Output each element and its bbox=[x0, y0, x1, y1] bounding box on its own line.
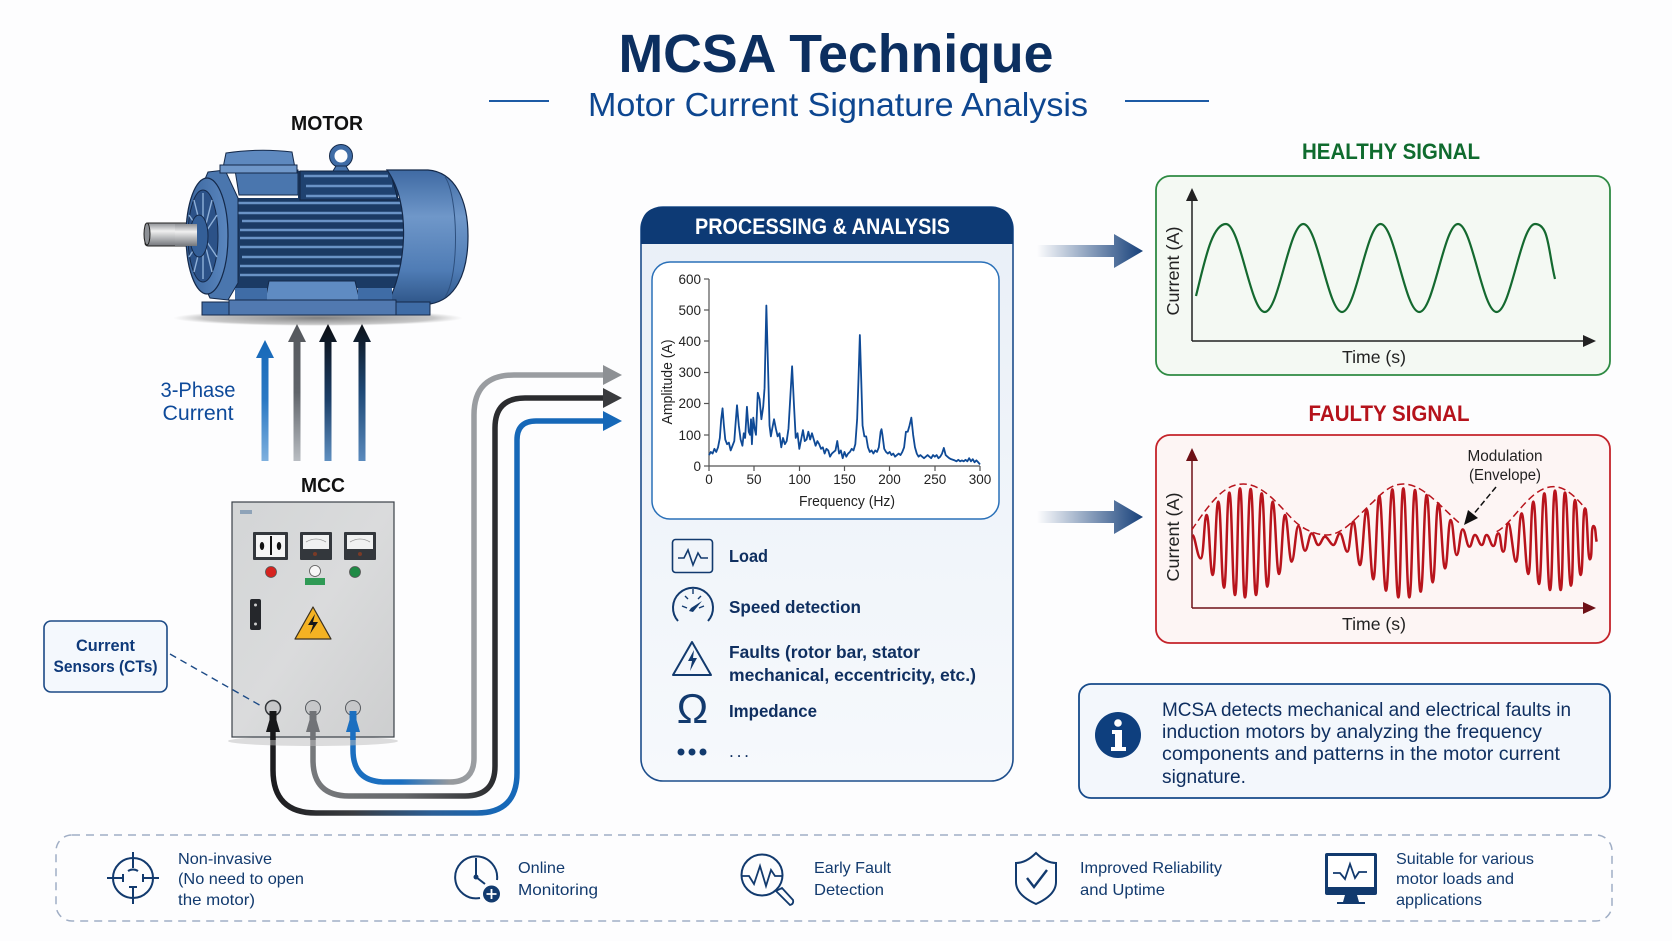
chart: frequency spectrum: 200 bbox=[878, 472, 901, 487]
MCC cabinet bbox=[228, 502, 398, 746]
callout: current sensors: Sensors (CTs) bbox=[54, 657, 158, 676]
annotation: modulation envelope bbox=[1464, 448, 1542, 525]
panel: healthy signal chart: Time (s) bbox=[1342, 347, 1406, 367]
meter 3 bbox=[344, 532, 376, 560]
panel header: PROCESSING & ANALYSIS bbox=[695, 214, 950, 239]
icon: high-voltage warning bbox=[295, 607, 331, 639]
chart: frequency spectrum: 400 bbox=[678, 334, 701, 349]
callout: info box: signature. bbox=[1162, 766, 1246, 788]
cable: inner blue to gray bbox=[353, 375, 605, 782]
title: MCSA Technique bbox=[618, 24, 1054, 84]
arrow: black phase bbox=[319, 324, 337, 461]
list item: faults: Faults (rotor bar, stator bbox=[729, 642, 920, 662]
panel header bbox=[641, 207, 1013, 244]
benefit: non-invasive: (No need to open bbox=[178, 871, 304, 888]
chart: frequency spectrum: 300 bbox=[969, 472, 991, 487]
annotation: modulation envelope: (Envelope) bbox=[1469, 467, 1541, 484]
benefit: early fault detection bbox=[742, 854, 892, 905]
benefit: improved reliability: and Uptime bbox=[1080, 882, 1165, 899]
list item: faults bbox=[673, 642, 976, 685]
list item: impedance: Ω bbox=[677, 685, 708, 732]
panel: faulty signal chart: Current (A) bbox=[1163, 492, 1183, 582]
callout: current sensors bbox=[44, 621, 263, 707]
chart: frequency spectrum: Amplitude (A) bbox=[659, 340, 676, 424]
chart: frequency spectrum: 300 bbox=[678, 365, 701, 380]
benefit: online monitoring: Monitoring bbox=[518, 882, 598, 899]
arrowhead: gray cable bbox=[603, 365, 622, 385]
callout: info box: components and patterns in the motor current bbox=[1162, 743, 1561, 765]
arrow: gray phase bbox=[288, 324, 306, 461]
meter 1 bbox=[253, 532, 288, 560]
chart: frequency spectrum: Frequency (Hz) bbox=[799, 493, 895, 510]
label: motor: MOTOR bbox=[291, 113, 364, 135]
arrows: 3-phase current to motor bbox=[256, 324, 371, 461]
cable glands bbox=[266, 700, 360, 740]
icon: info bbox=[1095, 712, 1141, 758]
panel: healthy signal chart: Current (A) bbox=[1163, 226, 1183, 316]
benefit: early fault detection: Detection bbox=[814, 882, 884, 899]
benefit: online monitoring: Online bbox=[518, 860, 565, 877]
list item: speed detection: Speed detection bbox=[729, 597, 861, 617]
arrowhead: dark cable bbox=[603, 388, 622, 408]
chart: frequency spectrum bbox=[652, 262, 999, 519]
cables from MCC to processing bbox=[273, 365, 622, 813]
list item: more bbox=[678, 741, 749, 761]
cable: middle gray to black bbox=[313, 398, 605, 796]
cable: outer black to blue bbox=[273, 421, 605, 813]
arrow: processing to faulty signal bbox=[1037, 500, 1143, 534]
list item: impedance bbox=[677, 685, 817, 732]
benefit: suitable for various loads: Suitable for various bbox=[1396, 851, 1534, 868]
list item: speed detection bbox=[673, 588, 861, 621]
callout: current sensors: Current bbox=[76, 636, 135, 655]
heading: faulty signal: FAULTY SIGNAL bbox=[1308, 401, 1470, 426]
chart: frequency spectrum: 0 bbox=[693, 459, 701, 474]
list item: more: ... bbox=[729, 741, 749, 761]
label: 3-phase current: Current bbox=[162, 402, 234, 425]
benefit: suitable for various loads bbox=[1325, 851, 1534, 909]
panel: processing and analysis bbox=[641, 207, 1013, 781]
chart: frequency spectrum: 100 bbox=[788, 472, 811, 487]
arrow: processing to healthy signal bbox=[1037, 234, 1143, 268]
benefit: non-invasive bbox=[107, 851, 304, 909]
chart: frequency spectrum: 150 bbox=[833, 472, 856, 487]
panel: faulty signal chart bbox=[1156, 435, 1610, 643]
benefit: improved reliability: Improved Reliability bbox=[1080, 860, 1222, 877]
benefit: non-invasive: Non-invasive bbox=[178, 851, 272, 868]
annotation: modulation envelope: Modulation bbox=[1468, 448, 1542, 465]
callout: info box bbox=[1079, 684, 1610, 798]
indicator lights bbox=[266, 566, 360, 585]
meter 2 bbox=[300, 532, 332, 560]
chart: frequency spectrum: 250 bbox=[924, 472, 946, 487]
panel: faulty signal chart: Time (s) bbox=[1342, 614, 1406, 634]
chart: frequency spectrum: 600 bbox=[678, 272, 701, 287]
benefit: non-invasive: the motor) bbox=[178, 892, 255, 909]
chart: frequency spectrum: 50 bbox=[746, 472, 762, 487]
arrow: fourth conductor bbox=[353, 324, 371, 461]
callout: info box: MCSA detects mechanical and electrical faults in bbox=[1162, 699, 1571, 721]
chart: frequency spectrum: 100 bbox=[678, 428, 701, 443]
benefit: suitable for various loads: motor loads and bbox=[1396, 871, 1514, 888]
list item: faults: mechanical, eccentricity, etc.) bbox=[729, 665, 976, 685]
list item: load: Load bbox=[729, 546, 768, 566]
benefit: online monitoring bbox=[455, 856, 598, 902]
benefit: suitable for various loads: applications bbox=[1396, 892, 1482, 909]
list item: impedance: Impedance bbox=[729, 701, 817, 721]
benefit: early fault detection: Early Fault bbox=[814, 860, 892, 877]
motor illustration bbox=[144, 144, 468, 326]
chart: frequency spectrum: 200 bbox=[678, 396, 701, 411]
panel: benefits strip bbox=[56, 835, 1612, 921]
benefit: improved reliability bbox=[1016, 853, 1222, 904]
subtitle: Motor Current Signature Analysis bbox=[588, 86, 1088, 123]
label: 3-phase current: 3-Phase bbox=[160, 379, 236, 402]
list item: load bbox=[672, 540, 768, 572]
callout: info box: induction motors by analyzing the frequency bbox=[1162, 721, 1542, 743]
arrowhead: blue cable bbox=[603, 411, 622, 431]
arrow: blue phase bbox=[256, 340, 274, 461]
label: MCC: MCC bbox=[301, 475, 345, 497]
door handle bbox=[250, 599, 261, 630]
chart: frequency spectrum: 0 bbox=[705, 472, 713, 487]
chart: frequency spectrum: 500 bbox=[678, 303, 701, 318]
label: 3-phase current bbox=[160, 379, 236, 425]
heading: healthy signal: HEALTHY SIGNAL bbox=[1302, 139, 1480, 164]
panel: healthy signal chart bbox=[1156, 176, 1610, 375]
